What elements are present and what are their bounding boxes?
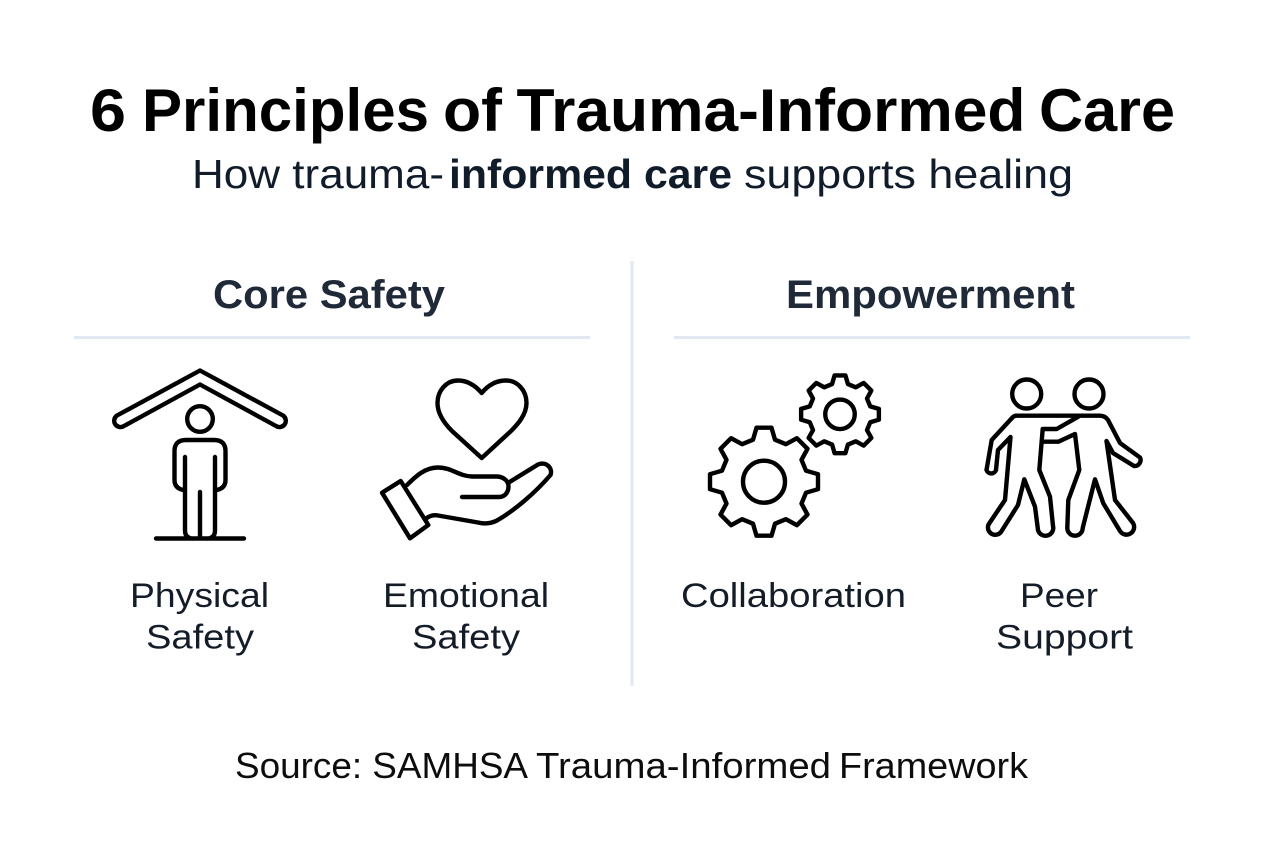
icon: peer support <box>986 380 1141 536</box>
panel: empowerment <box>674 273 1190 656</box>
icon: heart in hand <box>382 380 551 538</box>
label: emotional safety: Emotional <box>383 577 549 615</box>
subtitle: How trauma- <box>192 151 444 197</box>
rule: empowerment <box>674 336 1190 339</box>
heading: empowerment: Empowerment <box>786 273 1075 317</box>
label: physical safety: Physical <box>130 577 269 615</box>
icon: person under roof <box>114 370 286 538</box>
label: physical safety line 2: Safety <box>146 618 255 656</box>
label: peer support: Peer <box>1020 577 1098 615</box>
divider: vertical <box>630 261 634 686</box>
title: Trauma-Informed <box>516 77 1026 144</box>
source note: Trauma-Informed <box>536 745 831 786</box>
label: emotional safety line 2: Safety <box>412 618 521 656</box>
title: 6 <box>90 77 126 144</box>
label: collaboration: Collaboration <box>681 577 906 615</box>
source note: Framework <box>839 745 1029 786</box>
icon: gears <box>710 375 879 536</box>
title: of <box>443 77 503 144</box>
source note: Source: SAMHSA <box>235 745 528 786</box>
label: peer support line 2: Support <box>996 618 1133 656</box>
title: Care <box>1039 77 1175 144</box>
heading: core safety: Core Safety <box>213 273 446 317</box>
title: Principles <box>142 77 429 144</box>
subtitle: supports healing <box>744 151 1073 197</box>
subtitle: informed care <box>449 151 732 197</box>
panel: core safety <box>74 273 590 656</box>
rule: core safety <box>74 336 590 339</box>
